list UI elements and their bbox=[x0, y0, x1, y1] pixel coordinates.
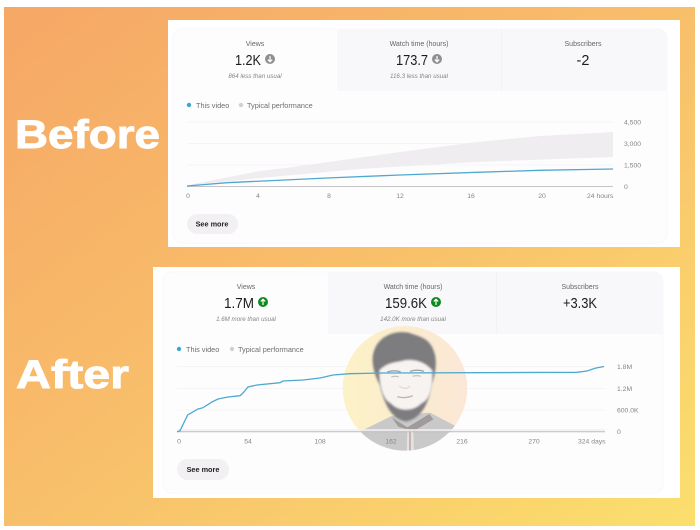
legend: before bbox=[187, 101, 313, 110]
button: see more before bbox=[187, 214, 238, 234]
metric: subscribers after: Subscribers bbox=[562, 284, 599, 291]
x axis labels bbox=[186, 193, 614, 200]
x axis labels: 8 bbox=[327, 193, 331, 200]
y axis labels: 3,000 bbox=[624, 141, 641, 148]
y axis labels: 0 bbox=[624, 184, 628, 191]
button: see more after bbox=[177, 459, 229, 480]
hair and beard bbox=[373, 332, 436, 421]
metric: watch time before bbox=[390, 41, 449, 80]
metric: watch time after: 159.6K bbox=[385, 296, 427, 312]
metric: views before: 864 less than usual bbox=[228, 73, 282, 80]
y axis labels: 1.8M bbox=[617, 364, 632, 371]
chart: before line chart bbox=[186, 120, 641, 200]
button: see more before: See more bbox=[196, 220, 228, 228]
y axis labels bbox=[624, 120, 641, 191]
metric: watch time after: Watch time (hours) bbox=[384, 284, 442, 291]
heading: After: After bbox=[16, 353, 129, 397]
metric: subscribers before: Subscribers bbox=[565, 41, 602, 48]
metric: views after: 1.6M more than usual bbox=[216, 316, 277, 323]
x axis labels: 4 bbox=[256, 193, 260, 200]
panel: before analytics bbox=[168, 20, 680, 247]
x axis labels: 324 days bbox=[578, 438, 606, 446]
y axis labels: 600.0K bbox=[617, 408, 639, 414]
y axis labels bbox=[617, 364, 639, 436]
y axis labels: 1,500 bbox=[624, 162, 641, 170]
chart: after line chart bbox=[177, 326, 639, 453]
x axis labels: 216 bbox=[456, 438, 468, 446]
metric: views before bbox=[228, 41, 282, 80]
y axis labels: 0 bbox=[617, 429, 621, 436]
metric: subscribers after: +3.3K bbox=[563, 296, 597, 312]
legend: after: This video bbox=[186, 345, 219, 354]
metric: views after: 1.7M bbox=[224, 296, 254, 312]
x axis labels: 54 bbox=[244, 438, 252, 446]
legend: before: Typical performance bbox=[247, 101, 313, 110]
metric: views before: Views bbox=[246, 41, 265, 48]
x axis labels: 108 bbox=[314, 438, 326, 446]
metric: views after bbox=[216, 284, 277, 323]
metric: views after: Views bbox=[237, 284, 256, 291]
metric: watch time before: 173.7 bbox=[396, 53, 428, 69]
jacket bbox=[362, 413, 458, 453]
x axis labels: 270 bbox=[528, 438, 540, 446]
legend: after: Typical performance bbox=[238, 345, 304, 354]
metric: subscribers before bbox=[565, 41, 602, 69]
metric: subscribers after bbox=[562, 284, 599, 312]
x axis labels: 16 bbox=[467, 193, 475, 200]
x axis labels: 20 bbox=[538, 193, 546, 200]
x axis labels: 162 bbox=[385, 438, 397, 446]
metric: watch time before: 116.3 less than usual bbox=[390, 73, 449, 80]
panel: after analytics bbox=[153, 267, 680, 498]
profile photo of presenter bbox=[343, 326, 467, 453]
face bbox=[379, 360, 432, 410]
y axis labels: 4,500 bbox=[624, 120, 641, 126]
x axis labels: 0 bbox=[177, 438, 181, 446]
metric: subscribers before: -2 bbox=[577, 53, 589, 69]
y axis labels: 1.2M bbox=[617, 386, 632, 393]
metric: views before: 1.2K bbox=[235, 53, 261, 69]
tabs: after metrics bbox=[216, 272, 663, 334]
x axis labels bbox=[177, 438, 606, 446]
tabs: before metrics bbox=[228, 29, 667, 91]
x axis labels: 12 bbox=[396, 193, 404, 200]
heading: Before: Before bbox=[15, 113, 160, 157]
metric: watch time after bbox=[380, 284, 446, 323]
x axis labels: 24 hours bbox=[587, 193, 614, 200]
button: see more after: See more bbox=[187, 465, 219, 474]
metric: watch time before: Watch time (hours) bbox=[390, 41, 448, 48]
after trend line bbox=[177, 366, 604, 432]
x axis labels: 0 bbox=[186, 193, 190, 200]
legend: before: This video bbox=[196, 101, 229, 110]
metric: watch time after: 142.0K more than usual bbox=[380, 316, 446, 323]
legend: after bbox=[177, 345, 304, 354]
